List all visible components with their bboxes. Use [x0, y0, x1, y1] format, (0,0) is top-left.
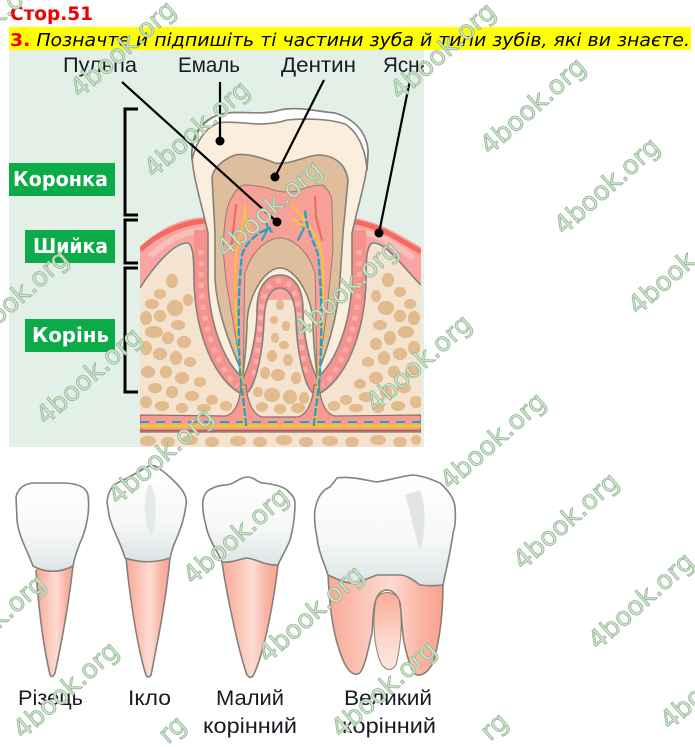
caption: molar: Великий — [344, 687, 432, 710]
jaw bone — [140, 245, 421, 447]
tooth type: premolar — [203, 477, 295, 677]
periodontal band — [194, 230, 366, 392]
watermarks: 4book.org — [474, 52, 592, 161]
label: dentin: Дентин — [281, 54, 356, 77]
panel: tooth anatomy — [9, 50, 431, 447]
pointer: gum — [374, 80, 410, 238]
band stripes — [201, 250, 359, 386]
caption: premolar — [203, 687, 297, 738]
watermarks: 4book.org — [30, 322, 148, 431]
bone spongy texture — [141, 274, 421, 446]
label: pulp: Пульпа — [63, 54, 137, 77]
dentin inner layer — [212, 154, 348, 375]
watermarks: 4book.org — [360, 309, 478, 418]
watermarks: 4book.org — [138, 75, 256, 184]
watermarks: 4book.org — [434, 387, 552, 496]
pointer: dentin — [270, 80, 324, 182]
watermarks: 4book.org — [252, 560, 370, 669]
caption: molar — [342, 687, 436, 738]
watermarks: 4book.org — [325, 635, 443, 744]
task instruction on yellow bar: 3. Позначте й підпишіть ті частини зуба й типи зубів, які ви знаєте. — [10, 30, 690, 51]
pulp chamber — [223, 185, 333, 378]
caption: canine: Ікло — [128, 687, 171, 710]
enamel — [192, 109, 368, 170]
watermarks: 4book.org — [210, 155, 328, 264]
tag: neck — [25, 230, 115, 263]
bracket: root — [125, 268, 138, 392]
tag: root — [25, 319, 115, 352]
gums — [140, 217, 421, 300]
caption: premolar: Малий — [216, 687, 284, 710]
nerve band at the base — [140, 385, 421, 432]
watermarks: 4book.org — [384, 0, 502, 106]
watermarks: 4book.org — [548, 132, 666, 241]
tooth type: incisor — [16, 483, 89, 677]
cross-section illustration of tooth — [140, 109, 421, 447]
caption: premolar: корінний — [203, 715, 297, 738]
pointer: enamel — [216, 82, 224, 146]
tag: root: Корінь — [32, 323, 109, 347]
watermarks: 4book.org — [287, 235, 405, 344]
bracket: crown — [125, 109, 138, 215]
pointer: pulp — [122, 82, 282, 226]
tag: crown — [9, 163, 115, 196]
watermarks: 4book.org — [177, 482, 295, 591]
tag: neck: Шийка — [33, 234, 108, 258]
tooth type: canine — [107, 466, 186, 677]
tooth body — [192, 109, 368, 378]
bracket: neck — [125, 220, 138, 263]
blood vessels and nerves in pulp — [231, 197, 324, 426]
watermarks: 4book.org — [7, 636, 125, 745]
tag: crown: Коронка — [13, 167, 108, 191]
caption: molar: корінний — [342, 715, 436, 738]
label: gum: Ясна — [383, 54, 431, 77]
label: enamel: Емаль — [178, 54, 240, 77]
caption: incisor: Різець — [18, 687, 83, 710]
watermarks: 4book.org — [507, 467, 625, 576]
page number heading: Стор.51 — [10, 4, 93, 25]
watermarks: 4book.org — [102, 402, 220, 511]
watermarks: rg — [475, 707, 515, 747]
band and bone outline — [140, 243, 421, 393]
tooth type: molar — [315, 475, 455, 675]
